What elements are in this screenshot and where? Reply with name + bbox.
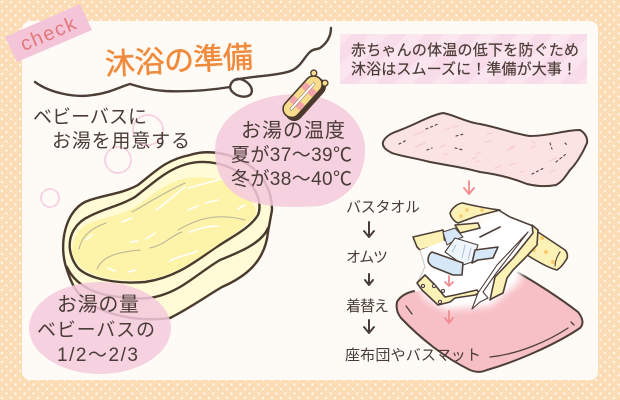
top sleeve <box>450 203 500 223</box>
water amount bubble: 1/2～2/3 <box>57 345 138 366</box>
collar strip <box>455 223 480 233</box>
bottom hem <box>417 275 479 305</box>
cushion illustration <box>397 272 582 372</box>
water amount bubble <box>29 282 171 374</box>
bath outer body <box>63 152 272 319</box>
water ripples grey <box>79 183 245 269</box>
white glow over cushion behind clothes <box>416 262 522 310</box>
neck edge <box>480 211 533 237</box>
thermometer icon <box>277 69 331 125</box>
message tape: 沐浴はスムーズに！準備が大事！ <box>351 61 577 78</box>
baby bath illustration <box>63 152 272 319</box>
water temperature bubble <box>215 94 365 207</box>
check tape label: check <box>17 12 81 56</box>
order list text <box>345 199 481 364</box>
water temperature bubble: お湯の温度 <box>241 119 345 142</box>
diaper right wing <box>472 247 498 263</box>
right sleeve <box>527 232 567 270</box>
message tape: 赤ちゃんの体温の低下を防ぐため <box>351 42 579 59</box>
bath inner basin <box>70 162 259 282</box>
decorative cloud outlines <box>41 115 163 207</box>
instruction text: prepare baby bath: ベビーバスに <box>33 106 147 128</box>
order list text: 着替え <box>346 298 389 315</box>
baby clothes illustration <box>413 203 567 309</box>
title curl line <box>35 28 331 97</box>
left sleeve <box>413 230 445 250</box>
water temperature bubble: 夏が37～39℃ <box>231 144 352 166</box>
water amount bubble: ベビーバスの <box>37 319 155 341</box>
diaper front <box>428 252 463 275</box>
body <box>420 211 533 300</box>
order list text: バスタオル <box>346 199 420 216</box>
water temperature bubble: 冬が38～40℃ <box>231 168 352 190</box>
diaper centre <box>445 238 478 265</box>
body left edge <box>417 250 425 283</box>
order list text: オムツ <box>346 249 388 266</box>
title: 沐浴の準備 <box>104 41 254 82</box>
check tape label <box>5 4 92 62</box>
water amount bubble: お湯の量 <box>57 293 139 316</box>
instruction text: prepare baby bath <box>33 106 190 152</box>
instruction text: prepare baby bath: お湯を用意する <box>52 130 190 152</box>
diaper upper wing <box>443 228 463 245</box>
white flap <box>472 232 528 309</box>
pink arrows over clothes and cushion <box>445 276 453 323</box>
bath rim lower edge <box>67 228 268 299</box>
bath towel illustration <box>383 113 587 186</box>
order list text: 座布団やバスマット <box>345 347 481 364</box>
message tape <box>340 34 587 84</box>
water highlights <box>86 180 245 272</box>
water <box>72 177 256 280</box>
pink arrow: towel to diaper <box>464 181 474 194</box>
list arrows <box>364 222 374 333</box>
right edge band <box>490 225 538 300</box>
